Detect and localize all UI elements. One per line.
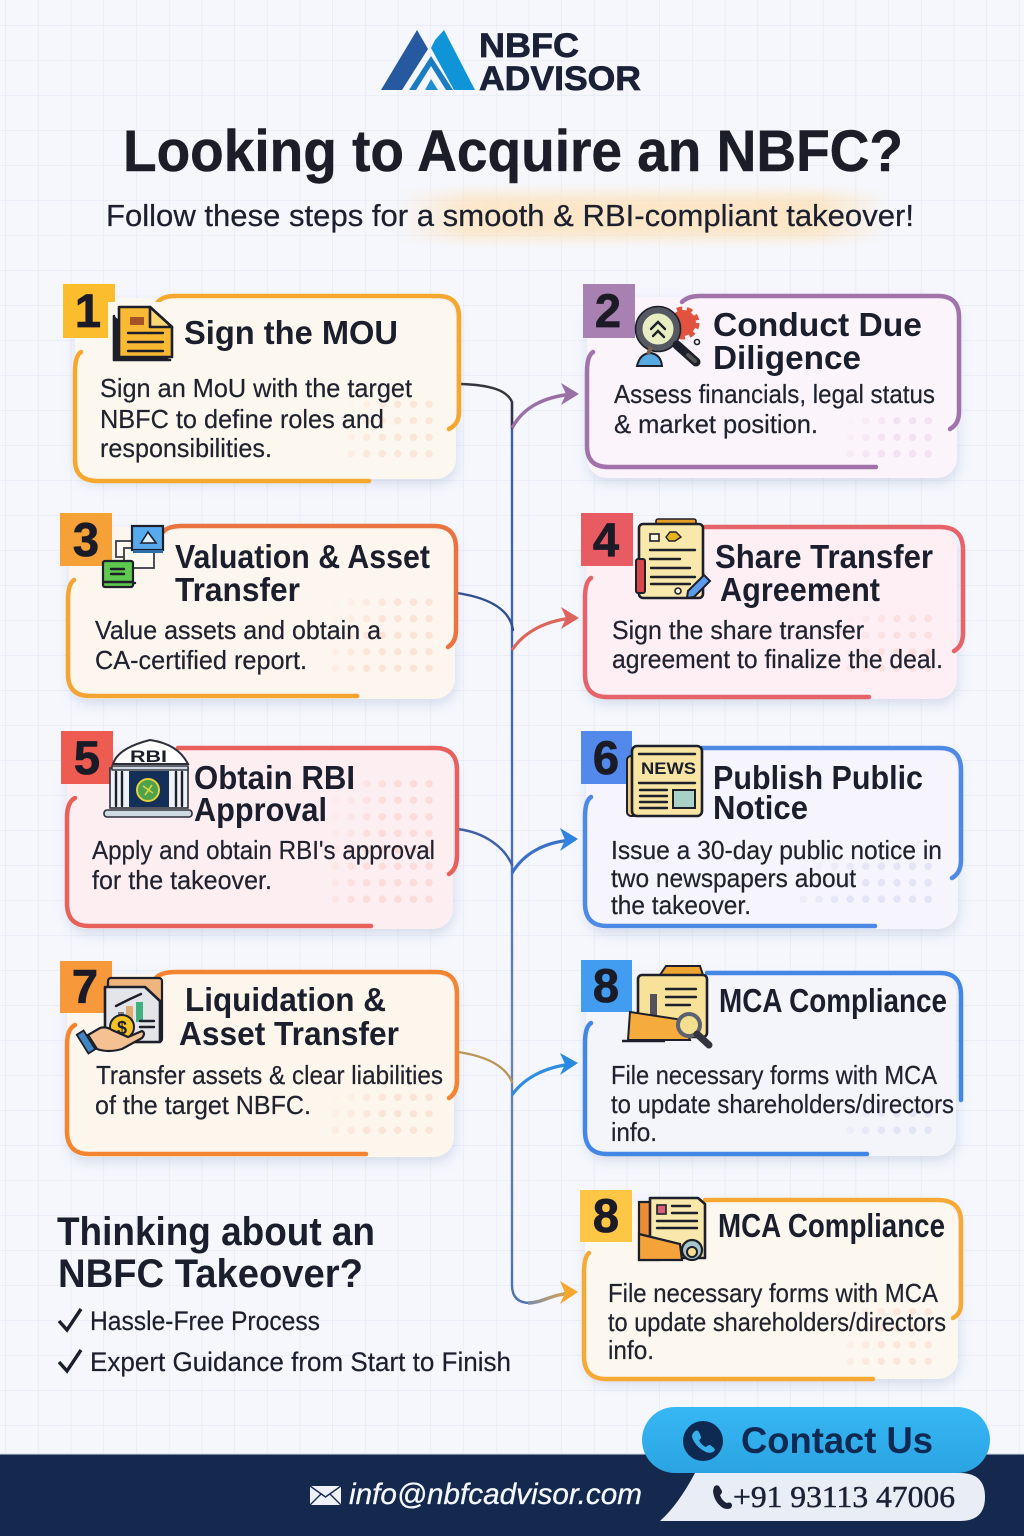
description: agreement to finalize the deal. (612, 644, 943, 674)
description: to update shareholders/directors (611, 1089, 954, 1119)
card background (69, 527, 455, 699)
card dots (848, 1110, 932, 1134)
heading: Asset Transfer (179, 1015, 399, 1052)
heading (713, 759, 923, 826)
card border (163, 526, 456, 647)
icon: folder with magnifier (622, 966, 709, 1045)
panel: step 6 publish public notice (581, 731, 961, 929)
card dots (332, 598, 433, 672)
heading: Sign the MOU (184, 314, 398, 351)
icon: document with chart, coin and hand: $ (117, 1018, 127, 1038)
number badge 1: 1 (75, 284, 101, 337)
number badge 8 second (580, 1189, 632, 1242)
icon: newspaper (627, 746, 702, 816)
heading: MCA Compliance (719, 982, 947, 1019)
heading: Liquidation & (185, 981, 386, 1018)
heading: Share Transfer (715, 538, 933, 575)
heading: Notice (713, 789, 808, 826)
icon: RBI building: RBI (130, 747, 167, 766)
number badge 8 second: 8 (593, 1189, 619, 1242)
call to action heading (57, 1210, 375, 1296)
description: File necessary forms with MCA (611, 1060, 938, 1090)
benefit: hassle-free process: Hassle-Free Process (90, 1306, 320, 1336)
number badge 3 (60, 513, 112, 566)
logo: NBFC Advisor (381, 27, 641, 98)
description: two newspapers about (611, 863, 857, 893)
card border (67, 748, 457, 926)
panel: step 5 obtain RBI approval (61, 731, 457, 929)
phone number: +91 93113 47006 (733, 1479, 955, 1514)
icon: magnifier and gear (636, 306, 700, 366)
description: Issue a 30-day public notice in (611, 835, 942, 865)
number badge 5: 5 (74, 731, 100, 784)
number badge 8: 8 (593, 959, 619, 1012)
heading: Conduct Due (713, 306, 922, 343)
card background (586, 750, 958, 929)
description: CA-certified report. (95, 645, 307, 675)
icon: RBI building (104, 740, 192, 817)
connector lines and arrows (457, 383, 579, 1304)
subtitle with highlight: Follow these steps for a smooth & RBI-compliant takeover! (106, 198, 914, 233)
heading (179, 981, 399, 1052)
number badge 2 (583, 284, 635, 338)
description (611, 835, 942, 920)
description: Transfer assets & clear liabilities (96, 1060, 443, 1090)
number badge 7 (60, 960, 112, 1013)
description (95, 1060, 443, 1120)
card dots (847, 1308, 932, 1365)
panel: step 2 conduct due diligence (583, 284, 959, 478)
description: File necessary forms with MCA (608, 1278, 939, 1308)
icon: envelope (310, 1486, 341, 1505)
description: Sign an MoU with the target (100, 373, 413, 403)
card background (75, 298, 456, 479)
email address: info@nbfcadvisor.com (349, 1478, 642, 1511)
description: Apply and obtain RBI's approval (92, 835, 435, 865)
description: responsibilities. (100, 433, 272, 463)
contact us label: Contact Us (741, 1420, 933, 1461)
description: the takeover. (611, 890, 751, 920)
heading (194, 759, 355, 828)
card background (585, 1202, 958, 1379)
number badge 1 (63, 284, 115, 338)
number badge 4 (581, 513, 633, 566)
number badge 8 (581, 959, 632, 1012)
number badge 3: 3 (73, 513, 99, 566)
description (611, 1060, 954, 1147)
panel: step 8 MCA compliance blue (581, 959, 961, 1156)
number badge 6: 6 (593, 731, 619, 784)
number badge 6 (581, 731, 632, 784)
card background (587, 297, 957, 478)
card border (75, 296, 459, 481)
icon: small phone (713, 1485, 732, 1509)
description (612, 615, 943, 674)
panel: step 7 liquidation and asset transfer (60, 960, 457, 1157)
card border (67, 972, 457, 1154)
card border (584, 1200, 961, 1379)
description: Sign the share transfer (612, 615, 864, 645)
description: for the takeover. (92, 865, 272, 895)
heading (715, 538, 933, 608)
heading: Valuation & Asset (175, 538, 430, 575)
card border (585, 527, 963, 697)
heading: Transfer (175, 571, 300, 608)
call to action text block (57, 1210, 511, 1377)
description (92, 835, 435, 895)
icon: agreement clipboard (636, 519, 710, 598)
panel: step 3 valuation and asset transfer (60, 513, 456, 699)
icon: phone circle (683, 1421, 723, 1461)
heading: MCA Compliance (718, 1207, 945, 1244)
panel: step 4 share transfer agreement (581, 513, 963, 699)
panel: closing step 8 MCA compliance orange (580, 1189, 961, 1379)
icon: newspaper: NEWS (641, 759, 696, 778)
description (100, 373, 413, 463)
heading: Diligence (713, 339, 861, 376)
card dots (847, 615, 932, 672)
number badge 7: 7 (72, 960, 98, 1013)
phone number pill (660, 1473, 985, 1521)
heading (175, 538, 430, 608)
description (614, 379, 935, 439)
panel: step 1 sign the MOU (63, 284, 459, 481)
card background (67, 974, 454, 1157)
benefit: expert guidance: Expert Guidance from Start to Finish (90, 1347, 511, 1377)
heading: Publish Public (713, 759, 923, 796)
logo: NBFC Advisor: NBFC (479, 27, 579, 65)
card dots (332, 780, 433, 903)
logo: NBFC Advisor: ADVISOR (479, 60, 641, 98)
icon: folder with seal (639, 1198, 705, 1260)
description: NBFC to define roles and (100, 404, 384, 434)
icon: document (108, 302, 176, 364)
card dots (847, 417, 932, 458)
card background (67, 750, 453, 929)
call to action heading: Thinking about an (57, 1210, 375, 1254)
contact us button (642, 1407, 990, 1473)
number badge 2: 2 (595, 284, 621, 337)
description (95, 615, 382, 675)
footer band (0, 1453, 1024, 1536)
call to action heading: NBFC Takeover? (58, 1252, 363, 1296)
card border (585, 748, 961, 926)
description (608, 1278, 946, 1365)
number badge 4: 4 (593, 513, 619, 566)
heading: Agreement (720, 571, 880, 608)
icon: document with chart, coin and hand (77, 978, 162, 1053)
card background (586, 528, 957, 699)
heading (713, 306, 922, 376)
card dots (332, 1094, 433, 1134)
description: & market position. (614, 409, 818, 439)
card dots (348, 400, 433, 458)
description: Assess financials, legal status (614, 379, 935, 409)
description: info. (608, 1335, 654, 1365)
icon: linked documents (103, 526, 163, 587)
description: of the target NBFC. (95, 1090, 311, 1120)
card border (587, 296, 959, 467)
title: Looking to Acquire an NBFC? (123, 119, 903, 184)
card border (585, 973, 961, 1154)
card background (586, 975, 956, 1156)
heading: Obtain RBI (194, 759, 355, 796)
number badge 5 (61, 731, 113, 784)
description: Value assets and obtain a (95, 615, 382, 645)
description: to update shareholders/directors (608, 1307, 946, 1337)
description: info. (611, 1117, 657, 1147)
card dots (800, 862, 932, 903)
heading: Approval (194, 791, 327, 828)
card border lower (68, 580, 357, 696)
